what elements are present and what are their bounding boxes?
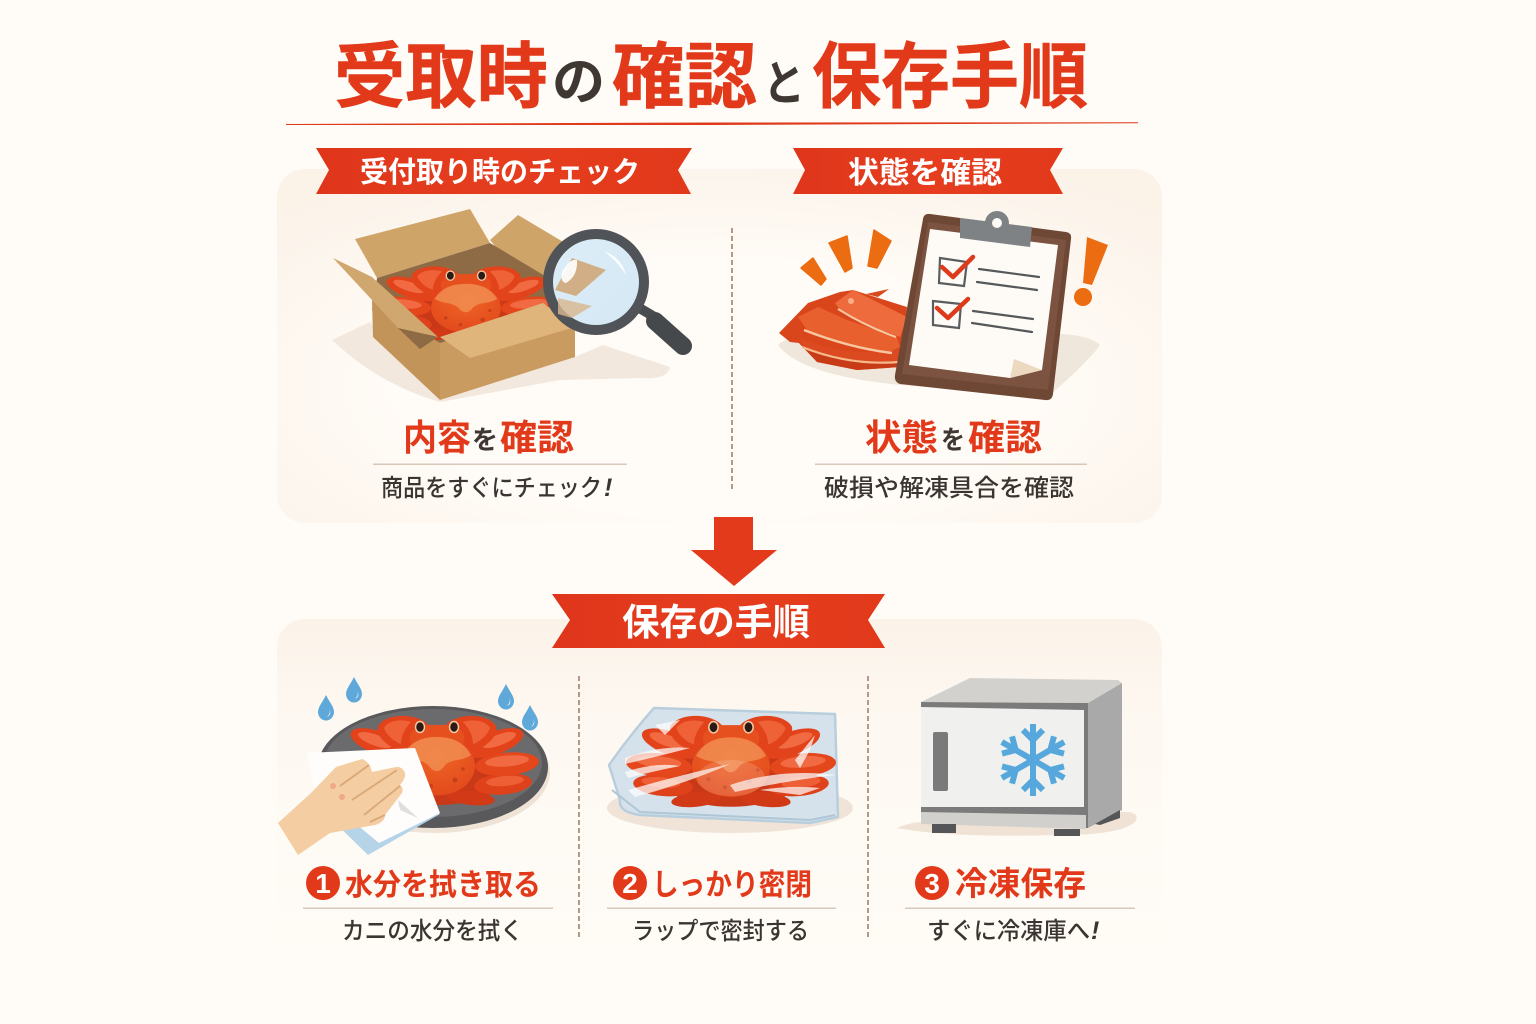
shadow — [897, 812, 1137, 836]
icon: wiping crab on plate — [278, 677, 550, 855]
icon: wrapped crab — [607, 708, 853, 833]
box shadow — [332, 322, 670, 402]
step 3 caption: すぐに冷凍庫へ — [927, 918, 1090, 945]
checkbox one — [939, 257, 973, 286]
panel: inspection background — [277, 169, 1162, 523]
heading: condition check — [865, 417, 1042, 458]
caption: contents: ! — [604, 474, 612, 502]
step 3 heading: 3 — [924, 868, 940, 899]
step 2 heading — [613, 866, 812, 902]
step 1 heading: 水分を拭き取る — [345, 869, 541, 902]
crab — [334, 716, 540, 807]
step 1 divider — [303, 908, 553, 909]
caption: condition: 破損や解凍具合を確認 — [824, 475, 1074, 502]
attention rays — [801, 230, 891, 285]
crab — [625, 716, 837, 809]
crab in box — [371, 266, 561, 342]
icon: box with crab and magnifier — [332, 209, 683, 402]
plate — [318, 706, 548, 828]
top face — [921, 678, 1122, 703]
box right face — [440, 300, 575, 400]
checkbox two — [933, 299, 968, 328]
box left flap — [333, 258, 438, 337]
heading: contents check: 内容 — [403, 417, 471, 458]
divider under contents heading — [373, 464, 627, 465]
hand — [278, 759, 405, 855]
step 2 heading: 2 — [622, 868, 638, 899]
front body — [921, 702, 1088, 828]
paper — [909, 229, 1058, 378]
water drops — [318, 677, 538, 730]
handle — [933, 732, 948, 791]
box right flap — [490, 215, 565, 300]
ribbon: receiving check: 受付取り時のチェック — [360, 156, 640, 189]
heading: contents check: を — [472, 425, 498, 455]
ribbon: condition check: 状態を確認 — [848, 157, 1002, 190]
door — [921, 707, 1084, 807]
clip — [960, 211, 1032, 247]
title: の — [552, 54, 605, 112]
step 3 caption: ! — [1091, 917, 1099, 945]
shadow — [778, 334, 1100, 395]
magnifier handle — [636, 306, 653, 316]
ribbon: condition check — [793, 148, 1063, 194]
title: 受取時 — [334, 38, 548, 118]
shadow — [607, 783, 853, 833]
title: 確認 — [612, 38, 757, 118]
ribbon: receiving check — [316, 148, 692, 194]
box left face — [372, 300, 440, 400]
step 2 divider — [607, 908, 836, 909]
step 3 heading: 冷凍保存 — [955, 865, 1086, 902]
panel: storage background — [277, 619, 1162, 964]
divider under condition heading — [815, 464, 1087, 465]
heading: condition check: を — [941, 425, 965, 455]
title underline — [286, 122, 1138, 125]
title — [334, 38, 1088, 118]
arrow — [691, 517, 777, 586]
center dashed divider — [731, 228, 733, 490]
heading: contents check — [403, 417, 574, 458]
caption: contents: 商品をすぐにチェック — [381, 475, 602, 502]
ribbon: storage steps — [552, 594, 885, 648]
paper curl — [1010, 359, 1042, 378]
step 3 divider — [905, 908, 1135, 909]
icon: crab legs and clipboard — [778, 211, 1108, 400]
exclamation mark — [1074, 237, 1108, 306]
feet — [932, 810, 1120, 836]
heading: condition check: 確認 — [968, 417, 1042, 458]
ribbon: storage steps: 保存の手順 — [622, 602, 810, 643]
title: 保存手順 — [812, 38, 1088, 118]
step 2 caption: ラップで密封する — [632, 918, 809, 945]
divider: step 2/3 — [867, 676, 869, 940]
step 1 heading: 1 — [315, 868, 331, 899]
step 1 caption: カニの水分を拭く — [342, 918, 523, 945]
checklist lines — [972, 269, 1039, 332]
heading: condition check: 状態 — [865, 417, 938, 458]
box back flap — [355, 209, 490, 278]
base — [921, 812, 1086, 829]
plate shadow — [320, 711, 550, 833]
box front flap — [440, 303, 575, 358]
snowflake — [997, 724, 1069, 796]
title: と — [763, 58, 805, 111]
towel — [306, 748, 440, 855]
heading: contents check: 確認 — [500, 417, 574, 458]
wrap tray — [609, 708, 838, 823]
magnifier lens — [548, 234, 644, 330]
step 2 heading: しっかり密閉 — [652, 869, 812, 902]
clipboard board — [895, 214, 1071, 400]
plastic sheen — [625, 720, 836, 797]
side face — [1088, 683, 1122, 828]
crab legs pile — [779, 289, 907, 370]
box interior — [372, 243, 560, 345]
icon: freezer — [897, 678, 1137, 836]
divider: step 1/2 — [578, 676, 580, 940]
